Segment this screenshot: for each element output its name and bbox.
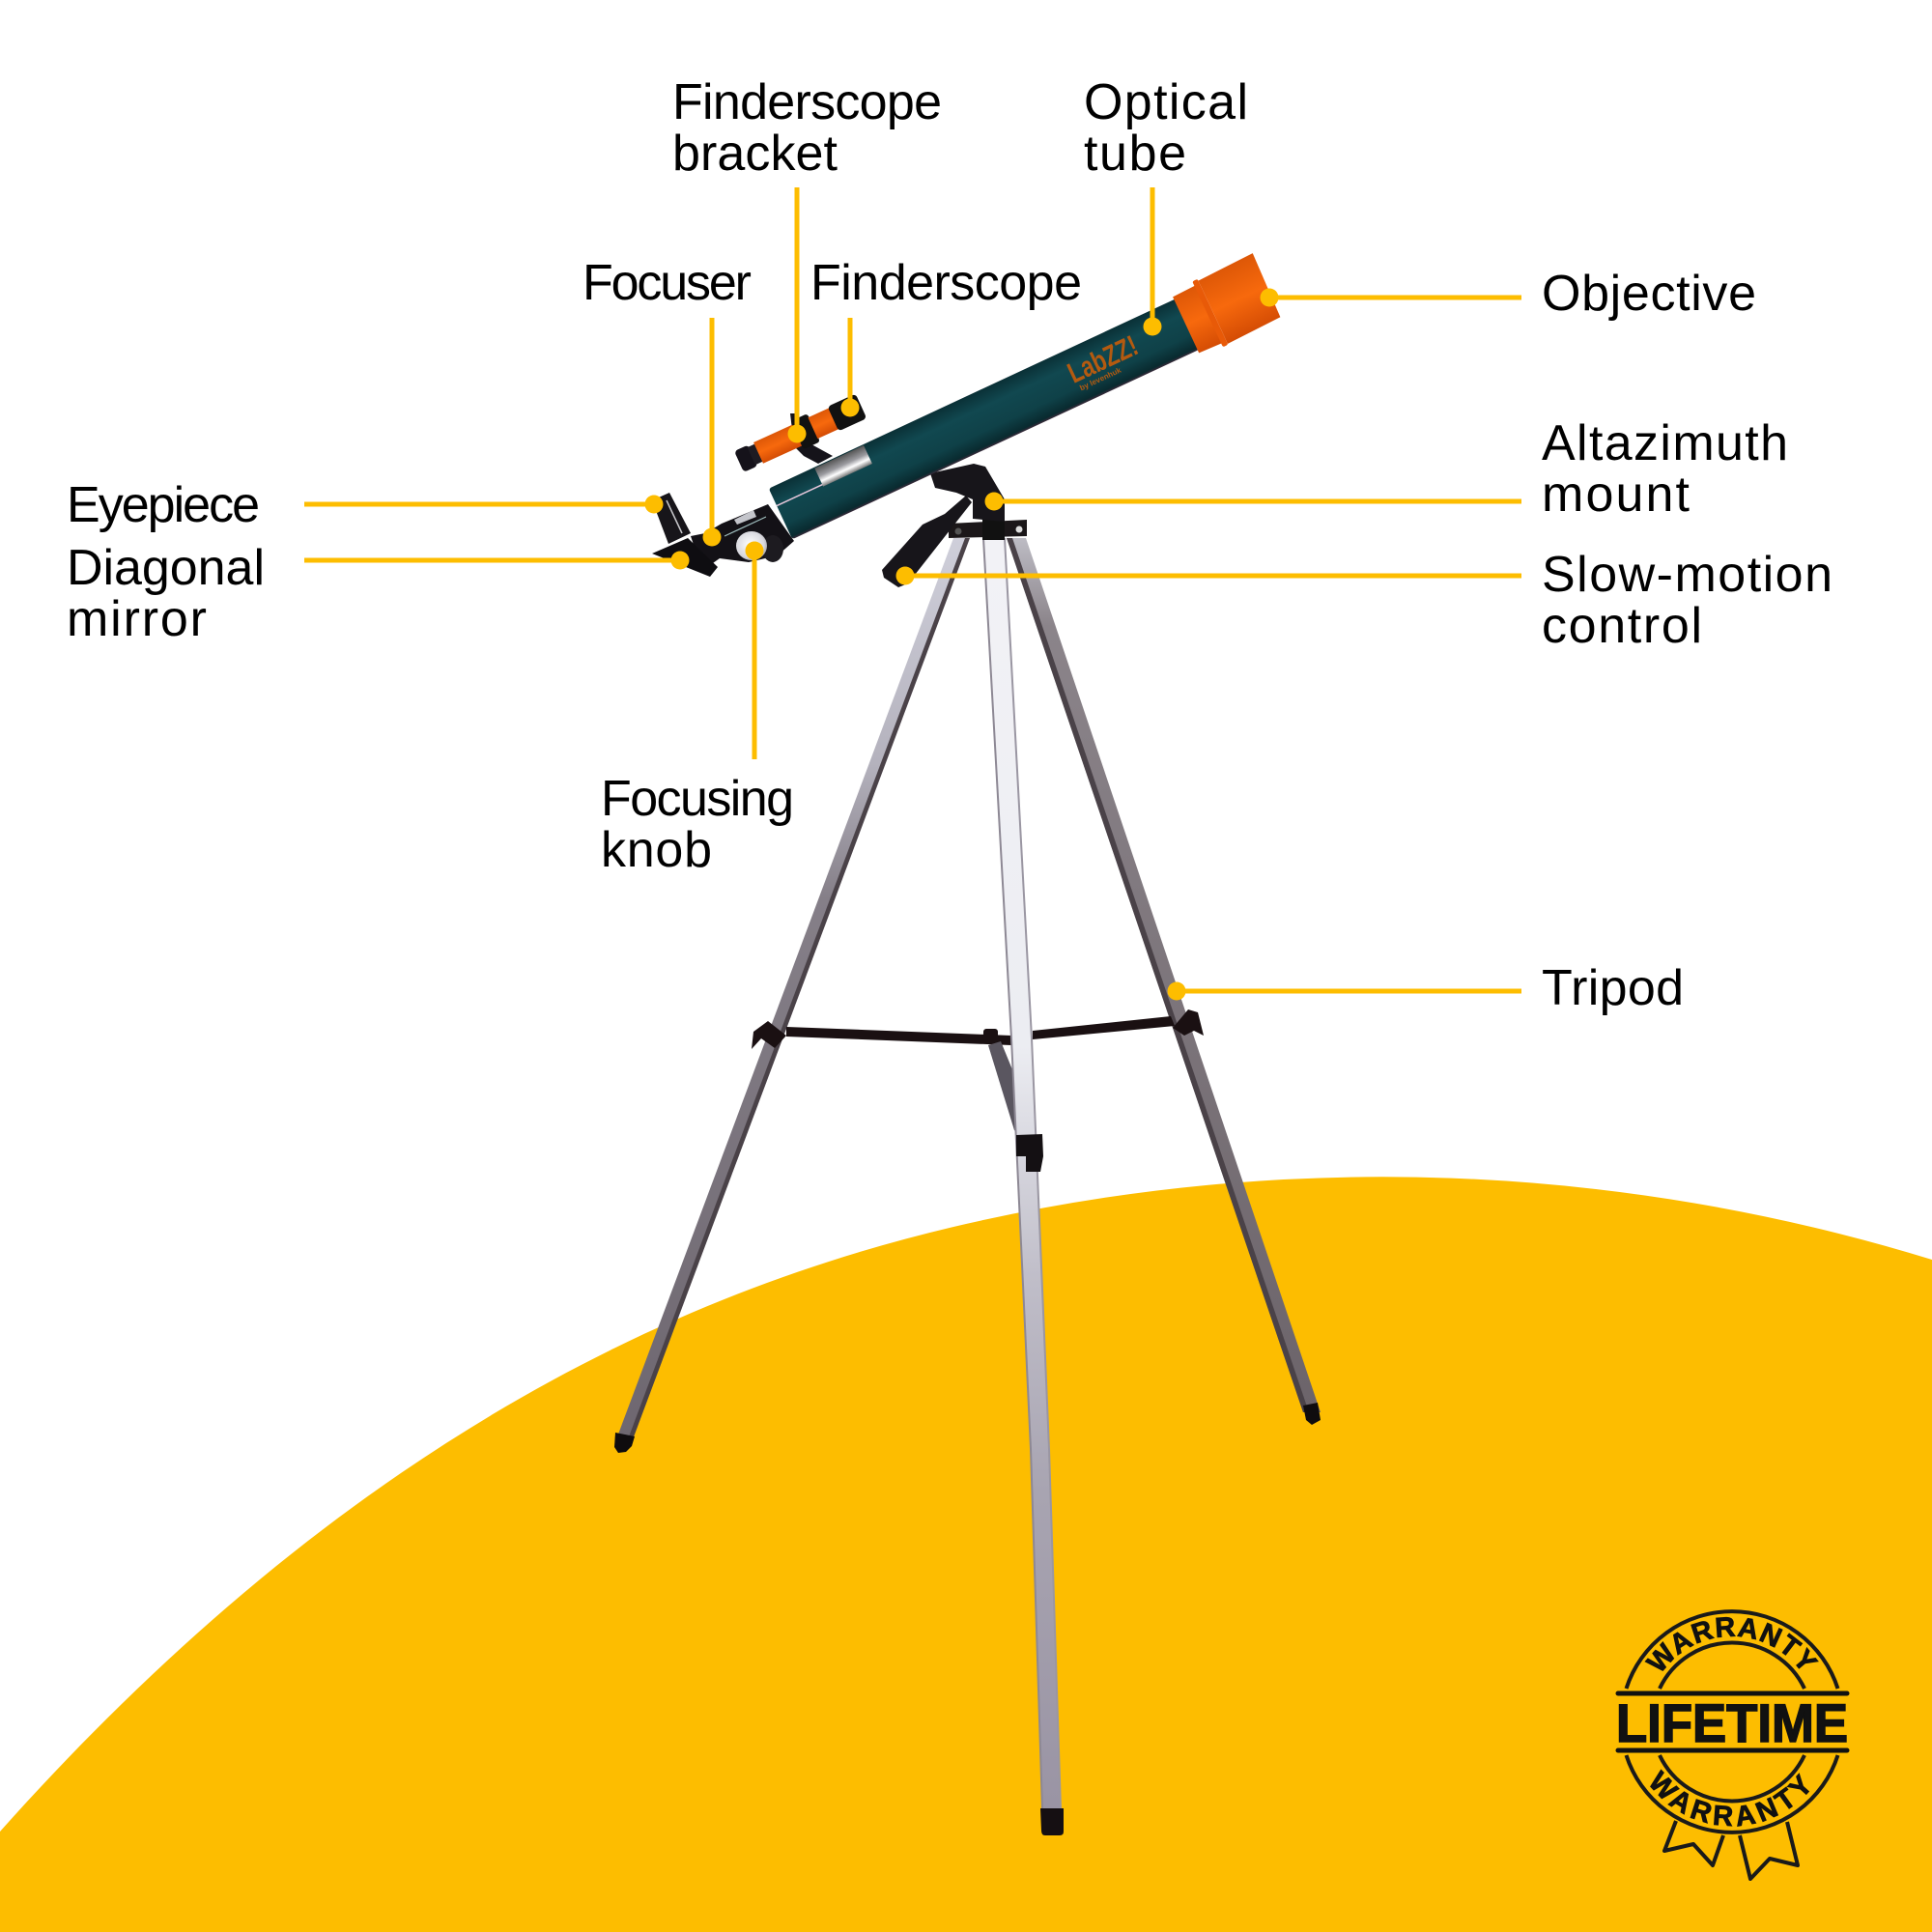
label: slow-motion control: control	[1542, 598, 1702, 654]
leader: finderscope	[840, 318, 860, 417]
tube	[769, 298, 1200, 539]
badge text: warranty top: WARRANTY	[1644, 1617, 1819, 1671]
tripod side legs	[616, 538, 1321, 1439]
label: diagonal mirror	[67, 540, 265, 647]
leader: focusing knob	[746, 541, 763, 759]
centre leg	[983, 538, 1061, 1809]
brand logo: by levenhuk	[1078, 365, 1123, 392]
leader: tripod	[1167, 981, 1521, 1001]
label: focusing knob	[601, 771, 794, 878]
leader: slow-motion control	[896, 566, 1521, 585]
diagonal mirror	[652, 538, 718, 577]
band lines	[1618, 1693, 1847, 1750]
label: eyepiece: Eyepiece	[67, 477, 260, 533]
tube highlight	[777, 481, 830, 506]
leader: focuser	[703, 318, 721, 547]
badge rings	[1627, 1611, 1837, 1833]
altazimuth mount body	[930, 464, 1005, 522]
label: diagonal mirror: mirror	[67, 591, 207, 647]
leader: eyepiece	[304, 495, 663, 514]
centre leg foot	[1040, 1808, 1064, 1835]
ribbon tails	[1664, 1821, 1798, 1879]
label: finderscope bracket: bracket	[672, 126, 838, 182]
objective dew cap	[1171, 253, 1283, 357]
label: optical tube: Optical	[1084, 74, 1248, 130]
leader: diagonal mirror	[304, 551, 690, 570]
silver label	[814, 445, 872, 487]
label: finderscope bracket: Finderscope	[672, 74, 942, 130]
badge text: lifetime: LIFETIME	[1616, 1692, 1848, 1753]
focusing knob	[736, 531, 767, 560]
label: slow-motion control	[1542, 547, 1833, 654]
label: focuser: Focuser	[582, 255, 752, 311]
eyepiece	[652, 493, 691, 544]
optical tube assembly	[765, 253, 1283, 547]
finderscope bracket base	[790, 413, 833, 464]
lifetime warranty badge	[1615, 1609, 1849, 1881]
finderscope	[732, 392, 867, 476]
label: focusing knob: knob	[601, 822, 712, 878]
label: slow-motion control: Slow-motion	[1542, 547, 1833, 603]
label: optical tube	[1084, 74, 1248, 182]
leader: objective	[1260, 288, 1521, 307]
leader: altazimuth mount	[985, 493, 1521, 510]
label: finderscope bracket	[672, 74, 942, 182]
leader lines and dots	[304, 187, 1521, 1001]
brand logo	[1063, 329, 1145, 394]
telescope photo illustration	[614, 253, 1321, 1835]
label: diagonal mirror: Diagonal	[67, 540, 265, 596]
yellow hill background	[0, 1177, 1932, 1932]
label: altazimuth mount: Altazimuth	[1542, 415, 1788, 471]
spreader strut	[988, 1041, 1018, 1133]
label: altazimuth mount: mount	[1542, 467, 1690, 523]
centre leg clip	[1016, 1134, 1043, 1172]
label: altazimuth mount	[1542, 415, 1788, 523]
label: tripod: Tripod	[1542, 960, 1684, 1016]
tripod feet	[614, 1403, 1321, 1453]
label: optical tube: tube	[1084, 126, 1186, 182]
brand logo: LabZZ!	[1063, 329, 1143, 389]
badge text: warranty bottom: WARRANTY	[1650, 1769, 1810, 1827]
label: focusing knob: Focusing	[601, 771, 794, 827]
label: finderscope: Finderscope	[810, 255, 1082, 311]
slow-motion control handle	[882, 496, 972, 587]
leader: finderscope bracket	[788, 187, 806, 442]
spreader braces	[752, 1009, 1204, 1049]
label: objective: Objective	[1542, 266, 1756, 322]
leader: optical tube	[1144, 187, 1161, 336]
tripod head	[949, 520, 1027, 540]
focuser	[691, 504, 794, 565]
